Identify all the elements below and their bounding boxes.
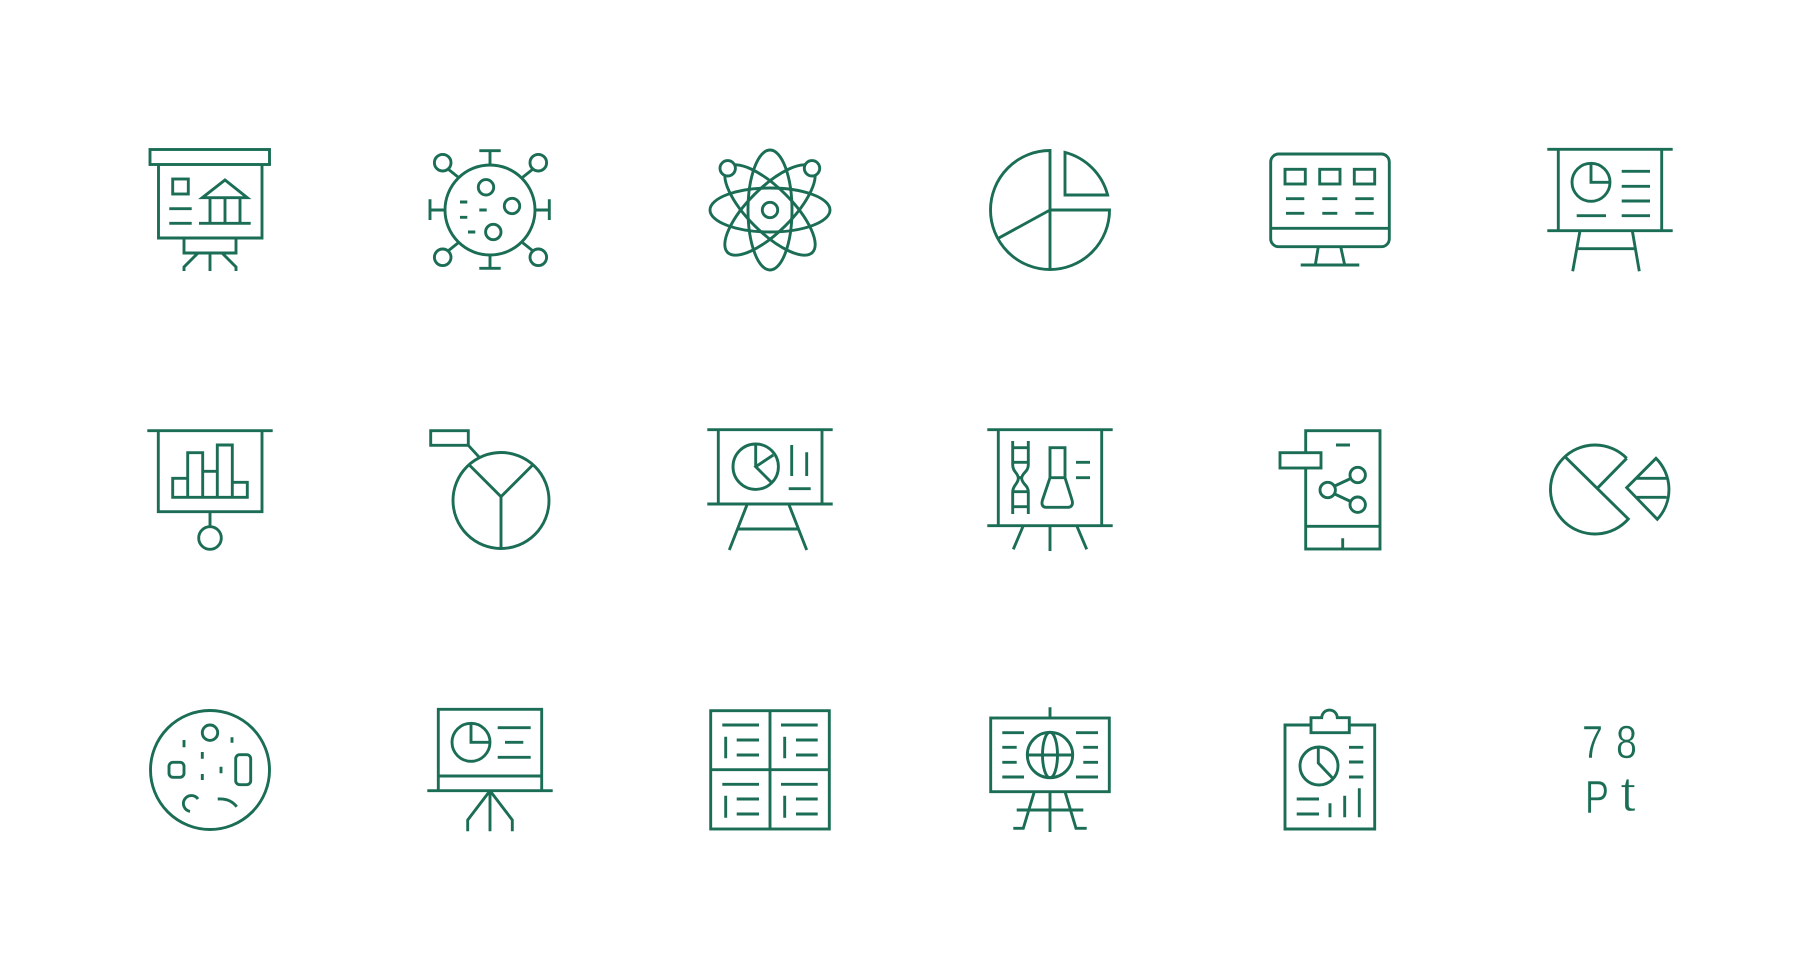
icon: four panel grid	[711, 711, 829, 829]
icon: pie chart with striped wedge	[1550, 445, 1669, 534]
icon: pie chart with detached slice	[991, 150, 1110, 270]
icon: easel with pie chart and text	[1547, 149, 1673, 271]
icon: mobile phone with share	[1280, 431, 1380, 549]
icon: screen with bar chart	[147, 431, 273, 549]
icon: easel with globe	[991, 707, 1109, 832]
icon: clipboard report	[1285, 710, 1375, 829]
icon: pie chart with label	[431, 431, 549, 548]
icon: virus	[430, 151, 549, 268]
icon: easel with DNA and flask	[987, 430, 1113, 551]
icon: periodic element 78 Pt: t	[1620, 766, 1635, 822]
icon: desktop monitor dashboard	[1271, 154, 1389, 265]
icon: projector screen with bank	[150, 150, 270, 271]
icon: periodic element 78 Pt: 7	[1582, 716, 1603, 768]
icon: periodic element 78 Pt: P	[1585, 771, 1609, 823]
icon: periodic element 78 Pt: 8	[1616, 716, 1637, 768]
icon: atom	[710, 150, 830, 270]
icon: petri dish	[150, 710, 270, 830]
icon: easel with pie and bars	[707, 430, 833, 550]
icon: presentation board on tripod	[427, 709, 553, 831]
icon: periodic element 78 Pt	[1582, 716, 1637, 823]
